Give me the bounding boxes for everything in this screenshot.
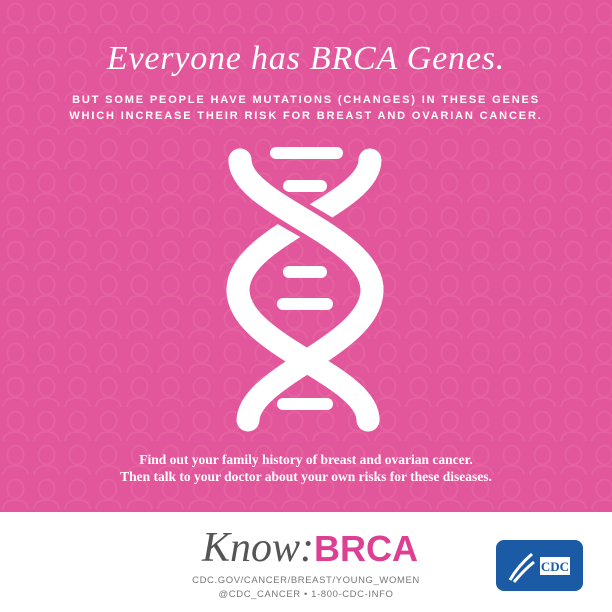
- footer: contact info: CDC.GOV/CANCER/BREAST/YOUNG_WOMEN: [192, 575, 420, 586]
- subtitle: WHICH INCREASE THEIR RISK FOR BREAST AND OVARIAN CANCER.: [69, 110, 543, 122]
- CDC logo: [496, 540, 583, 591]
- title: Everyone has BRCA Genes.: [107, 40, 505, 77]
- subtitle: [69, 94, 543, 122]
- bottom message: [120, 452, 492, 484]
- bottom message: Find out your family history of breast and ovarian cancer.: [139, 452, 473, 467]
- subtitle: BUT SOME PEOPLE HAVE MUTATIONS (CHANGES) IN THESE GENES: [72, 94, 540, 106]
- footer: Know BRCA logo: Know:BRCA: [202, 525, 418, 571]
- footer: contact info: [192, 575, 420, 600]
- CDC logo: CDC: [541, 559, 569, 574]
- bottom message: Then talk to your doctor about your own risks for these diseases.: [120, 469, 492, 484]
- footer: contact info: @CDC_CANCER • 1-800-CDC-INFO: [219, 589, 393, 600]
